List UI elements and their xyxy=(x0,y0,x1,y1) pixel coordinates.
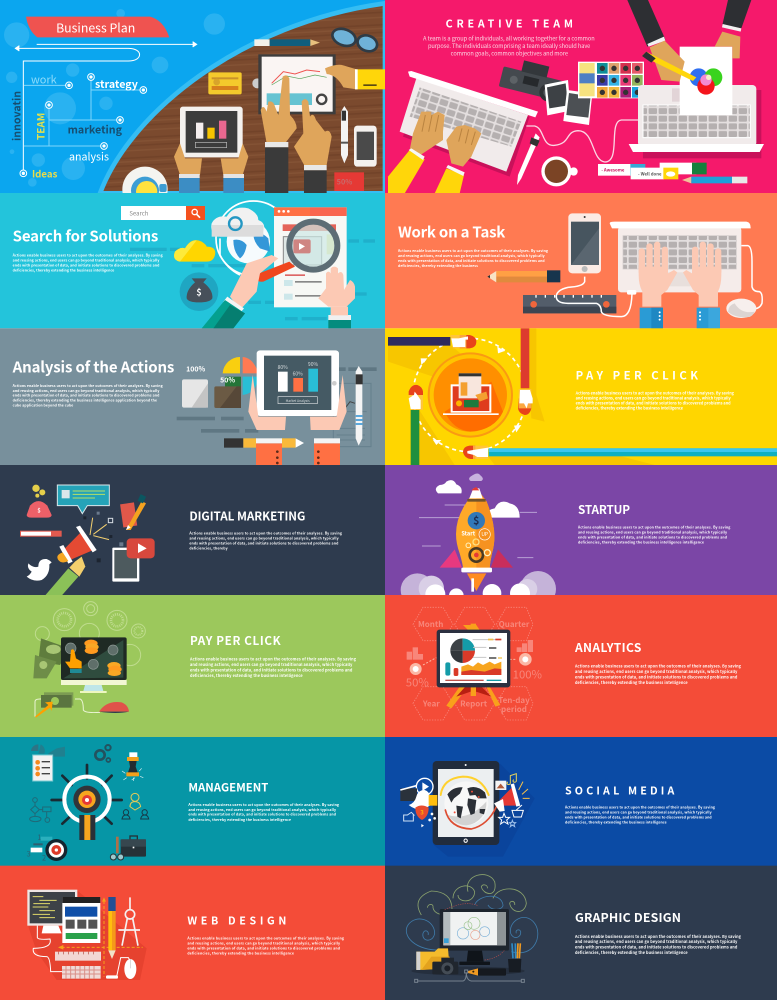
confetti squares xyxy=(83,512,123,562)
icon: tablet xyxy=(112,548,139,582)
icon: folder xyxy=(416,948,450,970)
body text: ends with presentation of data, and initiate solutions to discovered problems and xyxy=(398,259,545,264)
heading: ANALYTICS xyxy=(574,639,641,656)
clipboard with chart xyxy=(252,54,336,114)
icon: speech bubble xyxy=(57,485,109,514)
mind map words xyxy=(10,71,138,180)
icon: money bag xyxy=(180,272,218,311)
polaroid photos xyxy=(545,80,592,125)
icon: camera xyxy=(498,56,565,104)
mind map words: marketing xyxy=(68,122,123,137)
marker shadows xyxy=(388,328,655,465)
circular icon xyxy=(429,353,512,437)
pie chart xyxy=(223,357,258,395)
body text xyxy=(577,526,731,546)
body text xyxy=(12,384,164,409)
icon: pencil xyxy=(108,897,116,959)
icon: tablet xyxy=(433,761,499,845)
mind map words: innovatin xyxy=(10,91,25,141)
long shadow xyxy=(433,763,535,857)
icon: chess piece xyxy=(122,752,143,781)
body text: Actions enable business users to act upon the outcomes of their analyses. By saving xyxy=(577,526,731,531)
start up text: UP xyxy=(481,531,488,538)
hands on keyboard xyxy=(639,242,721,307)
icon: monitor xyxy=(61,637,127,693)
faint labels: Ten-day xyxy=(498,695,530,706)
dashed guides xyxy=(62,901,143,977)
icon: pencil xyxy=(224,438,304,448)
icon: purse: $ xyxy=(37,505,41,514)
body text: deficiencies, thereby extending the business intelligence xyxy=(190,673,303,679)
rocket flame xyxy=(467,573,486,592)
panel: pay per click green xyxy=(0,595,385,737)
panel: graphic design xyxy=(385,866,777,1000)
body text: ends with presentation of data, and initiate solutions to discovered problems and xyxy=(187,946,340,951)
clouds xyxy=(436,473,520,518)
icon: mouse xyxy=(106,959,136,979)
faint coin outlines xyxy=(35,602,145,666)
icon: coin stacks xyxy=(84,640,122,676)
body text: and reusing actions, end users can go beyond traditional analysis, which typically xyxy=(565,811,712,816)
body text xyxy=(574,664,742,686)
description xyxy=(423,34,595,57)
icon: bills and arrow xyxy=(35,692,73,718)
hands typing xyxy=(410,112,481,167)
body text: deficiencies, thereby extending the business intelligence xyxy=(565,820,667,825)
icon: red card: 50% xyxy=(337,176,352,187)
icon: team xyxy=(122,793,149,819)
body text: Actions enable business users to act upon the outcomes of their analyses. By saving xyxy=(188,532,343,537)
icon: twitter bird xyxy=(27,559,52,581)
blue cuffs xyxy=(640,308,720,328)
body text: and reusing actions, end users can go beyond traditional analysis, which typically xyxy=(13,258,159,263)
panel: work on a task xyxy=(385,193,777,328)
orbit arrows xyxy=(441,777,496,829)
body text xyxy=(186,936,345,957)
start up text: Start xyxy=(461,529,476,538)
body text: ends with presentation of data, and initiate solutions to discovered problems and xyxy=(578,536,727,541)
icon: basket and stars xyxy=(499,805,523,827)
icon: thumbs up xyxy=(404,812,414,821)
body text: and reusing actions, end users can go beyond traditional analysis, which typically xyxy=(398,254,545,259)
icon: marker tool xyxy=(468,968,506,976)
body text: and reusing actions, end users can go beyond traditional analysis, which typically xyxy=(189,536,339,541)
coin buttons xyxy=(65,643,118,669)
icon: music notes xyxy=(507,774,516,785)
body text: deficiencies, thereby extending the business xyxy=(398,264,478,269)
icon: flowchart xyxy=(30,798,51,822)
gears xyxy=(466,539,490,562)
cylinder 50 percent: 50% xyxy=(220,376,235,386)
green marker xyxy=(409,385,423,465)
icon: credit card xyxy=(208,72,242,94)
speed lines xyxy=(419,505,537,558)
body text: deficiencies, thereby extending the business intelligence xyxy=(187,952,294,957)
icon: purse xyxy=(27,501,52,518)
body text: deficiencies, thereby extending the business intelligence xyxy=(575,680,688,686)
faint labels: Quarter xyxy=(499,619,530,630)
body text: Actions enable business users to act upon the outcomes of their analyses. By saving xyxy=(12,253,164,258)
mind map words: Ideas xyxy=(32,166,58,180)
faint labels: 100% xyxy=(513,666,542,682)
icon: chart and checklist xyxy=(31,744,65,781)
icon: blue pencil xyxy=(682,177,747,183)
tablet with bar chart: 80% xyxy=(278,364,288,371)
body text: ends with presentation of data, and initiate solutions to discovered problems and xyxy=(13,263,159,268)
smoke xyxy=(401,571,556,607)
faint labels: 50% xyxy=(406,675,429,691)
search bar: Search xyxy=(129,209,149,218)
background bubbles xyxy=(4,9,225,187)
mind map words: work xyxy=(31,71,57,87)
red marker xyxy=(518,328,533,415)
sheet with colour wheel xyxy=(680,47,732,115)
body text: and reusing actions, end users can go beyond traditional analysis, which typically xyxy=(187,941,340,946)
icon: pen xyxy=(517,133,540,185)
mind map words: TEAM xyxy=(32,113,47,140)
body text: and reusing actions, end users can go beyond traditional analysis, which typically xyxy=(576,396,731,402)
cables xyxy=(556,246,762,317)
body text: and reusing actions, end users can go beyond traditional analysis, which typically xyxy=(13,389,159,394)
description: purpose. The individuals comprising a team ideally should have xyxy=(428,41,590,50)
cyan marker xyxy=(463,446,777,459)
faint labels: Report xyxy=(460,698,488,709)
dotted cable xyxy=(445,904,505,960)
body text: deficiencies, thereby extending the business intelligence application beyond the xyxy=(13,399,157,404)
banner: business plan xyxy=(26,17,169,37)
board charts xyxy=(445,662,501,681)
heading: MANAGEMENT xyxy=(188,780,268,796)
tablet with bars xyxy=(180,107,243,157)
tablet with bar chart: 90% xyxy=(308,361,318,368)
icon: coins xyxy=(32,485,45,498)
orange sleeves xyxy=(256,438,340,466)
icon: money bills xyxy=(33,638,69,678)
body text: ends with presentation of data, and initiate solutions to discovered problems and xyxy=(190,668,353,674)
body text: ends with presentation of data, and initiate solutions to discovered problems and xyxy=(575,945,738,951)
long shadow xyxy=(28,890,147,980)
heading: Analysis of the Actions xyxy=(12,357,174,378)
body text xyxy=(187,803,340,823)
body text: Actions enable business users to act upon the outcomes of their analyses. By saving xyxy=(189,657,357,663)
shadow base xyxy=(411,967,525,975)
cables xyxy=(33,926,131,977)
panel: social media xyxy=(385,737,777,866)
sparks xyxy=(90,518,113,540)
notes xyxy=(598,163,707,179)
faint nodes xyxy=(410,653,532,675)
icon: globe xyxy=(444,781,488,825)
heading: Work on a Task xyxy=(398,221,505,242)
body text: Actions enable business users to act upon the outcomes of their analyses. By saving xyxy=(564,806,716,811)
body text: Actions enable business users to act upon the outcomes of their analyses. By saving xyxy=(397,249,549,254)
body text: and reusing actions, end users can go beyond traditional analysis, which typically xyxy=(188,808,336,813)
body text: and reusing actions, end users can go beyond traditional analysis, which typically xyxy=(575,939,738,945)
heading: creative team: CREATIVE TEAM xyxy=(446,16,573,31)
icon: yellow cloud xyxy=(174,240,215,262)
heading: PAY PER CLICK xyxy=(190,632,282,649)
heading: Search for Solutions xyxy=(13,226,158,247)
cylinder 50 percent xyxy=(214,376,241,408)
raised hand xyxy=(318,267,355,328)
icon: pen xyxy=(341,106,348,163)
cables xyxy=(526,120,638,162)
decorative dashes xyxy=(130,239,375,320)
cable xyxy=(35,699,100,717)
body text: ends with presentation of data, and initiate solutions to discovered problems and xyxy=(576,400,731,406)
body text: deficiencies, thereby extending the business intelligence xyxy=(575,950,688,956)
icon: compass xyxy=(118,897,140,946)
icon: briefcase xyxy=(110,836,146,860)
hands holding tablet xyxy=(174,143,248,193)
dashed circle arrowheads xyxy=(421,347,521,445)
hand pointing from right xyxy=(325,65,385,89)
icon: keyboard xyxy=(62,966,101,979)
heading: GRAPHIC DESIGN xyxy=(575,908,681,926)
faint hexagon grid xyxy=(413,607,533,720)
icon: megaphone xyxy=(494,782,530,812)
faint labels: Month xyxy=(418,619,443,630)
swatch and poster grid xyxy=(578,62,644,98)
start up text xyxy=(461,529,490,540)
faint labels xyxy=(406,619,542,715)
body text: Actions enable business users to act upon the outcomes of their analyses. By saving xyxy=(575,391,735,397)
body text xyxy=(12,253,164,273)
wood desk xyxy=(100,3,385,193)
body text: and reusing actions, end users can go beyond traditional analysis, which typically xyxy=(575,669,738,675)
panel: startup xyxy=(385,465,777,607)
browser window xyxy=(62,897,100,943)
body text: ends with presentation of data, and initiate solutions to discovered problems and xyxy=(188,813,336,818)
arrows and path xyxy=(15,42,197,172)
body text: Actions enable business users to act upon the outcomes of their analyses. By saving xyxy=(574,934,742,940)
dollar porthole xyxy=(468,512,485,529)
tablet with bar chart: 60% xyxy=(293,371,303,378)
icon: search bar xyxy=(20,531,62,537)
presentation board xyxy=(437,630,510,687)
heading: SOCIAL MEDIA xyxy=(565,783,674,798)
body text: deficiencies, thereby extending the business intelligence intelligence xyxy=(578,541,704,546)
panel: business plan xyxy=(0,0,385,212)
icon: monitor with code xyxy=(27,890,77,933)
icon: photo xyxy=(495,781,506,790)
icon: camera xyxy=(432,958,458,974)
icon: pen cup xyxy=(508,943,521,972)
magnifying glass xyxy=(255,222,337,282)
faint labels: period xyxy=(501,704,527,715)
icon: pencil xyxy=(487,270,560,282)
icon: shield badge xyxy=(415,805,429,820)
icon: monitor xyxy=(440,909,509,965)
panel: pay per click yellow xyxy=(385,328,777,465)
right laptop xyxy=(629,85,764,158)
icon: hand and arm xyxy=(45,557,85,596)
icon: pen xyxy=(356,366,363,446)
mind map nodes xyxy=(20,74,147,177)
icon: coffee cup xyxy=(122,167,168,212)
browser window xyxy=(274,207,347,307)
icon: megaphone xyxy=(57,526,97,564)
body text: ends with presentation of data, and initiate solutions to discovered problems and xyxy=(575,675,738,681)
body text: Actions enable business users to act upon the outcomes of their analyses. By saving xyxy=(187,803,340,808)
icon: bird and video xyxy=(400,778,437,810)
body text xyxy=(189,657,357,679)
faint bar icons xyxy=(407,640,533,660)
body text: ends with presentation of data, and initiate solutions to discovered problems and xyxy=(13,394,159,399)
description: A team is a group of individuals, all working together for a common xyxy=(423,34,595,43)
icon: clicking hand xyxy=(65,649,82,673)
cylinder 100 percent: 100% xyxy=(186,365,205,375)
heading: DIGITAL MARKETING xyxy=(189,508,305,525)
icon: target with arrows xyxy=(27,832,67,864)
dollar porthole: $ xyxy=(473,514,479,529)
panel: search for solutions xyxy=(0,193,385,328)
icon: gears xyxy=(95,745,111,762)
body text xyxy=(188,532,343,551)
body text: deficiencies, thereby xyxy=(189,546,228,551)
mind map lines xyxy=(24,77,143,146)
guide arrowheads xyxy=(58,897,106,950)
tablet with bar chart xyxy=(257,350,339,416)
body text: and reusing actions, end users can go beyond traditional analysis, which typically xyxy=(190,662,353,668)
icon: ruler xyxy=(523,295,616,313)
icon: red card xyxy=(334,172,364,191)
icon: video button xyxy=(127,538,155,558)
icon: target with arrows: 2 xyxy=(42,853,46,864)
body text: deficiencies, thereby extending the business intelligence xyxy=(188,818,291,823)
heading: WEB DESIGN xyxy=(187,913,286,928)
icon: shield badge: 3 xyxy=(420,807,424,816)
decorative dashes xyxy=(177,367,377,433)
icon: ship wheel xyxy=(52,765,122,840)
icon: mouse xyxy=(99,702,129,713)
icon: pencil xyxy=(254,39,320,46)
icon: coffee cup xyxy=(541,156,578,186)
arms with pencil xyxy=(627,0,751,82)
body text xyxy=(575,391,735,411)
body text xyxy=(564,806,716,825)
icon: mouse xyxy=(726,299,756,318)
blue-purple marker xyxy=(388,335,476,348)
report sheet xyxy=(333,383,371,447)
body text: ends with presentation of data, and initiate solutions to discovered problems and xyxy=(189,541,338,546)
body text: deficiencies, thereby extending the business intelligence xyxy=(576,405,684,411)
banner: business plan: Business Plan xyxy=(56,19,135,37)
faint labels: Year xyxy=(422,698,440,709)
left laptop xyxy=(400,71,538,177)
body text: cube application beyond the cube xyxy=(13,404,73,409)
body text xyxy=(397,249,549,269)
panel: web design xyxy=(0,866,385,1000)
body text: Actions enable business users to act upon the outcomes of their analyses. By saving xyxy=(574,664,742,670)
icon: target with arrows: 1 xyxy=(37,832,41,843)
panel: analysis of the actions xyxy=(0,328,385,466)
mind map words: strategy xyxy=(95,77,138,92)
laptop xyxy=(610,222,751,295)
hand holding magnifier xyxy=(202,255,278,328)
pointing hands xyxy=(261,75,332,193)
body text: and reusing actions, end users can go beyond traditional analysis, which typically xyxy=(578,531,727,536)
dashed click circle xyxy=(413,338,526,452)
body text: Actions enable business users to act upon the outcomes of their analyses. By saving xyxy=(186,936,345,941)
notes: - Well done xyxy=(638,171,662,177)
rocket fins xyxy=(440,549,513,568)
icon: cloud with at sign xyxy=(211,208,264,237)
heading: STARTUP xyxy=(578,501,630,518)
icon: ruler xyxy=(55,952,101,961)
rocket body xyxy=(456,487,494,572)
easel xyxy=(446,624,500,708)
description: common goals, common objectives and more xyxy=(451,48,568,57)
icon: money bag: $ xyxy=(196,286,202,299)
heading: PAY PER CLICK xyxy=(576,367,698,383)
icon: target with arrows: 3 xyxy=(27,849,31,860)
icon: glasses xyxy=(330,26,379,54)
swirl decorations xyxy=(406,875,538,953)
panel: analytics xyxy=(385,595,777,737)
yellow sleeves xyxy=(388,150,464,193)
icon: smartphone xyxy=(568,213,601,273)
bezier line xyxy=(415,970,524,982)
hands holding tablet xyxy=(248,375,347,430)
cuffs xyxy=(409,148,465,176)
panel: management xyxy=(0,737,385,866)
mind map words: analysis xyxy=(69,149,109,164)
body text: ends with presentation of data, and initiate solutions to discovered problems and xyxy=(565,815,712,820)
notes: - Awesome xyxy=(601,167,625,173)
search bar xyxy=(121,206,205,220)
small share icons xyxy=(421,813,436,827)
body text xyxy=(574,934,742,956)
panel: digital marketing xyxy=(0,465,385,596)
icon: globe with ring xyxy=(216,201,291,276)
body text: deficiencies, thereby extending the business intelligence xyxy=(13,268,114,273)
panel: creative team xyxy=(385,0,777,193)
cylinder 100 percent xyxy=(182,365,208,408)
tablet with bar chart: Market Analysis xyxy=(286,398,310,403)
icon: ticket and marker xyxy=(120,494,146,530)
body text: Actions enable business users to act upon the outcomes of their analyses. By saving xyxy=(12,384,164,389)
icon: smartphone xyxy=(354,126,377,167)
